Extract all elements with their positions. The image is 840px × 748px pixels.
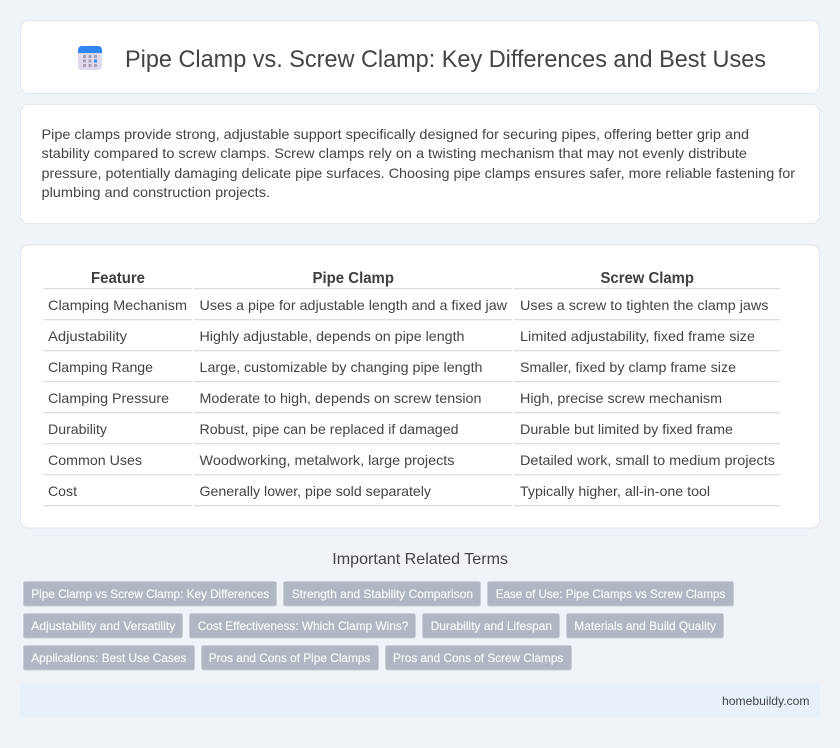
- row: clamping mechanism: [43, 297, 780, 320]
- tag: Pros and Cons of Screw Clamps: [393, 651, 563, 665]
- row: cost: [43, 483, 780, 506]
- tag: Pipe Clamp vs Screw Clamp: Key Differences: [31, 587, 269, 601]
- tag: Ease of Use: Pipe Clamps vs Screw Clamps: [496, 587, 725, 601]
- table header row: Feature: [91, 270, 145, 287]
- footer: site name: homebuildy.com: [722, 694, 810, 708]
- row: adjustability: [43, 328, 780, 351]
- text block: introduction paragraph: plumbing and construction projects.: [42, 184, 270, 200]
- tag: Strength and Stability Comparison: [292, 587, 473, 601]
- heading: related terms: Important Related Terms: [332, 551, 508, 568]
- row: clamping mechanism: Uses a pipe for adjustable length and a fixed jaw: [200, 297, 508, 313]
- row: clamping range: [43, 359, 780, 382]
- row: clamping range: Smaller, fixed by clamp frame size: [520, 359, 736, 375]
- tag: Applications: Best Use Cases: [31, 651, 186, 665]
- tag: [422, 614, 560, 638]
- table header row: Screw Clamp: [600, 270, 694, 287]
- row: common uses: Detailed work, small to medium projects: [520, 452, 775, 468]
- row: common uses: [43, 452, 780, 475]
- panel: header: [20, 20, 820, 94]
- tag: [566, 614, 724, 638]
- row: clamping mechanism: Clamping Mechanism: [48, 297, 187, 313]
- row: clamping range: Large, customizable by changing pipe length: [200, 359, 482, 375]
- row: adjustability: Highly adjustable, depends on pipe length: [200, 328, 464, 344]
- row: cost: Typically higher, all-in-one tool: [520, 483, 710, 499]
- tag: [190, 614, 416, 638]
- table header row: [43, 270, 780, 289]
- row: cost: Cost: [48, 483, 77, 499]
- row: clamping pressure: Clamping Pressure: [48, 390, 169, 406]
- tag: [24, 614, 182, 638]
- row: clamping pressure: [43, 390, 780, 413]
- title: Pipe Clamp vs. Screw Clamp: Key Differences and Best Uses: [125, 46, 766, 73]
- row: common uses: Woodworking, metalwork, large projects: [200, 452, 454, 468]
- row: clamping mechanism: Uses a screw to tighten the clamp jaws: [520, 297, 768, 313]
- tag: Pros and Cons of Pipe Clamps: [209, 651, 370, 665]
- row: common uses: Common Uses: [48, 452, 142, 468]
- panel: comparison table: [20, 245, 820, 528]
- footer: [20, 684, 820, 718]
- table header row: Pipe Clamp: [312, 270, 394, 287]
- tag: [202, 646, 378, 670]
- tag: Cost Effectiveness: Which Clamp Wins?: [198, 619, 409, 633]
- tag: [386, 646, 572, 670]
- text block: introduction paragraph: pressure, potentially damaging delicate pipe surfaces. Choosing pipe clamps ensures safer, more reliable fastening for: [42, 165, 795, 181]
- panel: introduction: [20, 104, 820, 224]
- row: clamping pressure: High, precise screw mechanism: [520, 390, 722, 406]
- row: adjustability: Limited adjustability, fixed frame size: [520, 328, 755, 344]
- row: clamping range: Clamping Range: [48, 359, 153, 375]
- tag: [488, 582, 734, 606]
- row: durability: [43, 421, 780, 444]
- tag: [284, 582, 480, 606]
- row: adjustability: Adjustability: [48, 328, 127, 344]
- row: cost: Generally lower, pipe sold separately: [200, 483, 431, 499]
- row: durability: Robust, pipe can be replaced if damaged: [200, 421, 458, 437]
- tag: [24, 582, 276, 606]
- tag: Durability and Lifespan: [431, 619, 552, 633]
- tag: Materials and Build Quality: [574, 619, 716, 633]
- row: durability: Durable but limited by fixed frame: [520, 421, 733, 437]
- row: durability: Durability: [48, 421, 107, 437]
- panel: related term tags: [24, 582, 734, 670]
- text block: introduction paragraph: Pipe clamps provide strong, adjustable support specifically designed for securing pipes, offering better grip and: [42, 126, 749, 142]
- tag: Adjustability and Versatility: [31, 619, 175, 633]
- row: clamping pressure: Moderate to high, depends on screw tension: [200, 390, 482, 406]
- tag: [24, 646, 194, 670]
- text block: introduction paragraph: [42, 126, 795, 200]
- icon: calendar: [78, 46, 102, 70]
- text block: introduction paragraph: stability compared to screw clamps. Screw clamps rely on a twisting mechanism that may not evenly distribute: [42, 145, 747, 161]
